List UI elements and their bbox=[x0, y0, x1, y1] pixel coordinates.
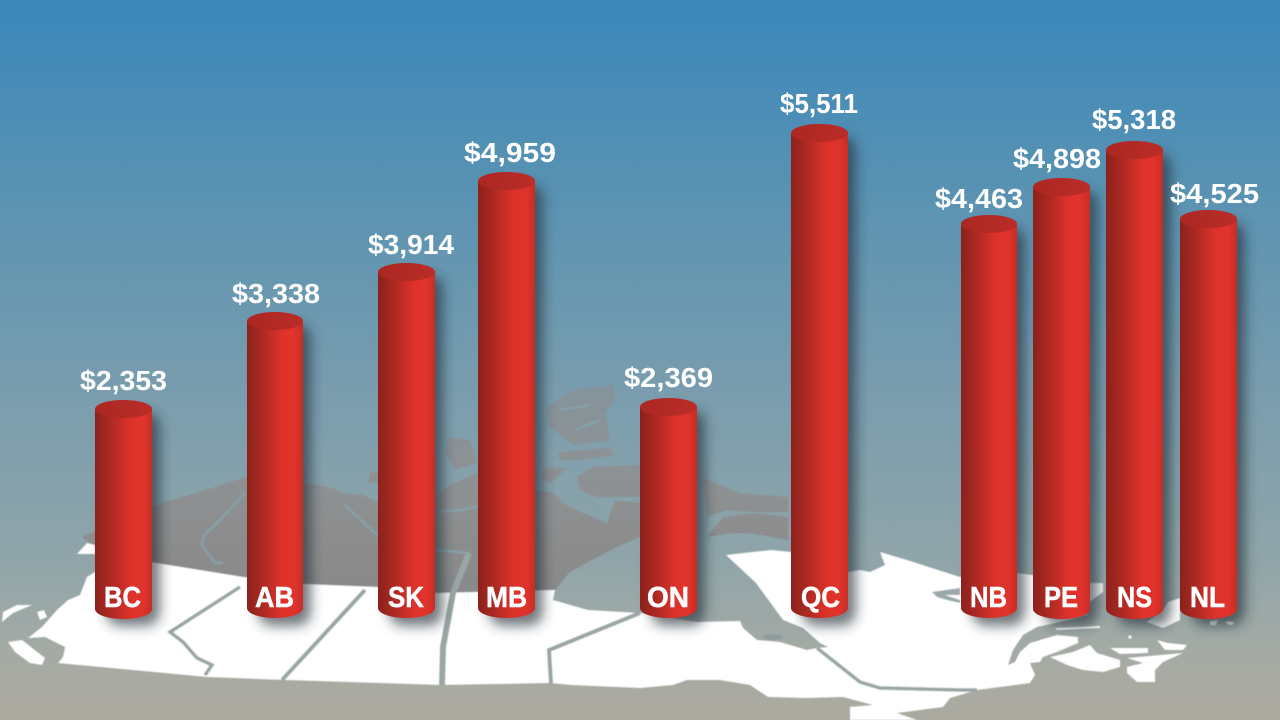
province label: ON: ON bbox=[647, 582, 689, 614]
value: NS: $5,318 bbox=[1092, 104, 1176, 135]
value: NL: $4,525 bbox=[1170, 178, 1259, 209]
province label: BC: BC bbox=[104, 582, 141, 614]
bar: PE bbox=[1013, 143, 1101, 619]
value: QC: $5,511 bbox=[780, 88, 858, 119]
province label: NS: NS bbox=[1117, 582, 1152, 614]
province label: AB: AB bbox=[255, 582, 294, 614]
value: MB: $4,959 bbox=[464, 137, 556, 168]
bar: NL bbox=[1170, 178, 1259, 619]
map of Canada bbox=[2, 385, 1234, 720]
bar: BC bbox=[80, 365, 167, 619]
map: southern Canada land bbox=[2, 543, 1234, 720]
value: SK: $3,914 bbox=[368, 229, 454, 260]
bar: NS bbox=[1092, 104, 1176, 619]
map: inland water and borders bbox=[170, 553, 977, 690]
province label: MB: MB bbox=[486, 582, 527, 614]
map: northern territories and arctic islands bbox=[82, 385, 788, 593]
value: ON: $2,369 bbox=[624, 362, 713, 393]
province label: NB: NB bbox=[970, 582, 1007, 614]
province label: QC: QC bbox=[801, 582, 840, 614]
map: Ungava Bay inlet bbox=[932, 588, 960, 603]
bar shadows bbox=[106, 136, 1245, 626]
province label: PE: PE bbox=[1044, 582, 1078, 614]
province label: SK: SK bbox=[388, 582, 424, 614]
value: NB: $4,463 bbox=[935, 183, 1023, 214]
bar: NB bbox=[935, 183, 1023, 618]
province label: NL: NL bbox=[1190, 582, 1225, 614]
value: AB: $3,338 bbox=[232, 278, 320, 309]
bar: ON bbox=[624, 362, 713, 618]
value: PE: $4,898 bbox=[1013, 143, 1101, 174]
value: BC: $2,353 bbox=[80, 365, 167, 396]
bar: MB bbox=[464, 137, 556, 618]
bar: SK bbox=[368, 229, 454, 618]
bar: QC bbox=[780, 88, 858, 618]
map: channels between northern land bbox=[202, 405, 600, 563]
bar: AB bbox=[232, 278, 320, 618]
map: Lake bbox=[763, 634, 783, 640]
